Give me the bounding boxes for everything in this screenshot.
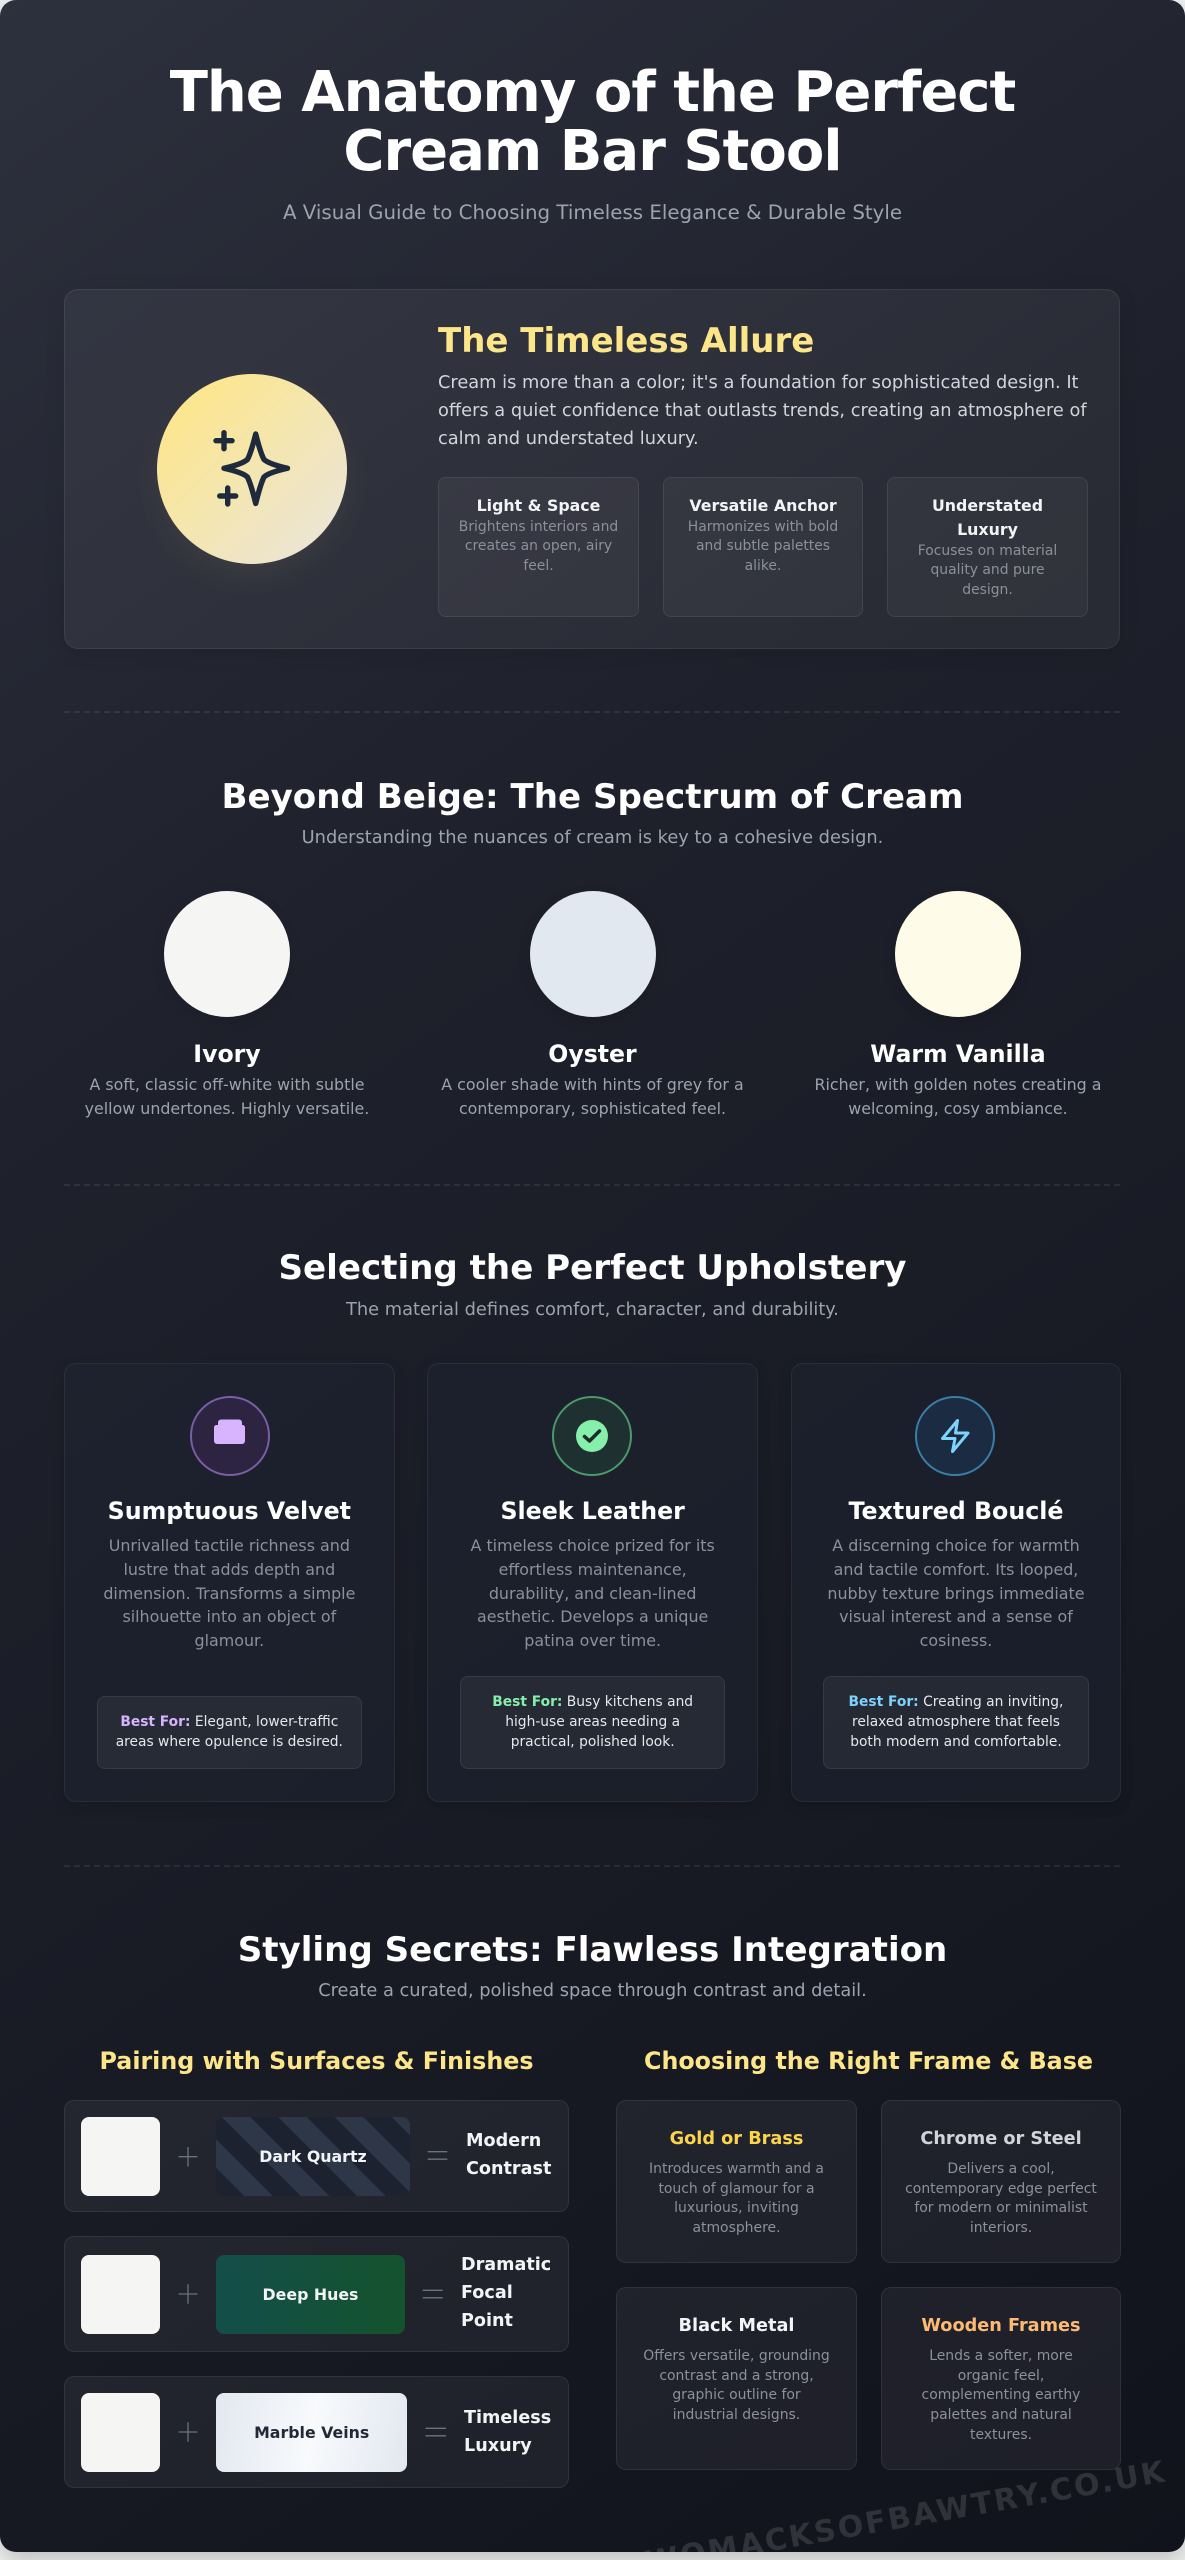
result: Timeless <box>464 2408 551 2428</box>
heading: upholstery: Selecting the Perfect Upholstery <box>278 1248 906 1288</box>
card description: dimension. Transforms a simple <box>103 1584 355 1602</box>
swatch: oyster <box>441 891 744 1118</box>
card description <box>827 1536 1085 1650</box>
swatch: oyster: contemporary, sophisticated feel. <box>459 1099 726 1118</box>
frame card: wooden frames: Lends a softer, more <box>929 2348 1073 2364</box>
heading: styling: Styling Secrets: Flawless Integration <box>238 1930 947 1970</box>
frame card: wooden frames: complementing earthy <box>922 2387 1080 2403</box>
card description: visual interest and a sense of <box>839 1607 1073 1626</box>
card: understated luxury: Luxury <box>957 520 1018 538</box>
card description <box>470 1536 715 1650</box>
icon: velvet <box>190 1396 270 1476</box>
heading: spectrum: Beyond Beige: The Spectrum of Cream <box>222 776 964 816</box>
frame card: chrome or steel: Chrome or Steel <box>920 2128 1082 2148</box>
card description: A discerning choice for warmth <box>832 1536 1080 1555</box>
intro paragraph: Cream is more than a color; it's a foundation for sophisticated design. It <box>438 372 1079 393</box>
best for: Best For: Busy kitchens and <box>492 1694 693 1710</box>
equals sign <box>426 2428 446 2436</box>
card: versatile anchor: Versatile Anchor <box>689 496 837 514</box>
swatch: warm vanilla: welcoming, cosy ambiance. <box>848 1099 1068 1118</box>
card: light & space: Light & Space <box>477 496 600 514</box>
swatch: oyster: A cooler shade with hints of grey for a <box>441 1075 744 1094</box>
frame card: wooden frames: palettes and natural <box>930 2407 1072 2423</box>
card title: Textured Bouclé <box>849 1496 1063 1524</box>
panel: velvet <box>64 1363 395 1802</box>
frame card: black metal: graphic outline for <box>672 2387 801 2403</box>
card title: Sleek Leather <box>500 1496 685 1524</box>
best for <box>823 1676 1089 1769</box>
swatch: ivory: A soft, classic off-white with subtle <box>90 1075 364 1094</box>
title: The Anatomy of the Perfect <box>170 60 1015 125</box>
frame card: gold or brass: Introduces warmth and a <box>649 2161 824 2177</box>
result <box>466 2131 551 2179</box>
frame card: gold or brass: atmosphere. <box>692 2220 781 2236</box>
pairing row: dramatic focal point <box>64 2236 569 2352</box>
swatch: warm vanilla <box>815 891 1101 1118</box>
card: understated luxury: Understated <box>932 496 1043 514</box>
subtitle: A Visual Guide to Choosing Timeless Elegance & Durable Style <box>283 201 902 224</box>
surface: marble veins <box>216 2393 407 2472</box>
best for <box>460 1676 725 1769</box>
card description: aesthetic. Develops a unique <box>477 1607 708 1626</box>
card: light & space: creates an open, airy <box>465 538 612 554</box>
best for: Best For: Elegant, lower-traffic <box>120 1714 338 1730</box>
frame card: black metal: Offers versatile, grounding <box>643 2348 830 2364</box>
best for: high-use areas needing a <box>505 1714 680 1730</box>
intro paragraph <box>438 372 1087 448</box>
swatch: ivory <box>85 891 369 1118</box>
stool swatch <box>81 2255 160 2334</box>
intro paragraph: calm and understated luxury. <box>438 428 699 448</box>
stool swatch <box>81 2393 160 2472</box>
frame card: gold or brass: touch of glamour for a <box>658 2181 815 2197</box>
frame card: chrome or steel: contemporary edge perfect <box>905 2181 1097 2197</box>
column heading: pairing: Pairing with Surfaces & Finishes <box>100 2046 533 2074</box>
result <box>464 2408 551 2456</box>
surface: deep hues: Deep Hues <box>263 2285 358 2304</box>
frame card: wooden frames <box>881 2287 1121 2470</box>
swatch: oyster: Oyster <box>548 1040 637 1068</box>
card: understated luxury: Focuses on material <box>918 542 1057 558</box>
surface: dark quartz <box>216 2117 410 2196</box>
best for: relaxed atmosphere that feels <box>852 1714 1060 1730</box>
plus sign <box>178 2284 198 2304</box>
surface: deep hues <box>216 2255 405 2334</box>
card: versatile anchor: and subtle palettes <box>696 538 830 554</box>
icon: boucle <box>915 1396 995 1476</box>
card description: patina over time. <box>524 1631 661 1650</box>
panel: leather <box>427 1363 758 1802</box>
best for: practical, polished look. <box>511 1734 675 1750</box>
card: light & space <box>438 477 639 617</box>
swatch: warm vanilla: Warm Vanilla <box>870 1040 1046 1068</box>
heading: The Timeless Allure <box>438 321 814 361</box>
card description: cosiness. <box>920 1631 992 1650</box>
frame card: black metal: contrast and a strong, <box>659 2368 814 2384</box>
card: light & space: Brightens interiors and <box>459 518 618 534</box>
plus sign <box>178 2147 198 2166</box>
card description: A timeless choice prized for its <box>471 1536 715 1555</box>
swatch: ivory: Ivory <box>193 1040 261 1068</box>
card description: nubby texture brings immediate <box>827 1584 1085 1602</box>
best for: areas where opulence is desired. <box>116 1734 343 1750</box>
result: Modern <box>466 2131 541 2151</box>
frame card: wooden frames: organic feel, <box>958 2368 1044 2384</box>
card description: durability, and clean-lined <box>489 1584 696 1602</box>
surface: dark quartz: Dark Quartz <box>259 2147 367 2166</box>
result <box>461 2255 551 2331</box>
subheading: styling: Create a curated, polished space through contrast and detail. <box>318 1980 867 2001</box>
icon: sparkles in cream circle <box>157 374 347 568</box>
equals sign <box>428 2151 448 2160</box>
card: versatile anchor: alike. <box>745 558 781 574</box>
card: versatile anchor: Harmonizes with bold <box>688 518 838 534</box>
frame card: wooden frames: Wooden Frames <box>921 2316 1081 2336</box>
frame card: black metal: Black Metal <box>679 2316 794 2336</box>
card description: and tactile comfort. Its looped, <box>834 1560 1078 1579</box>
frame card: gold or brass <box>616 2100 857 2263</box>
title <box>170 60 1015 184</box>
swatch: ivory: yellow undertones. Highly versatile. <box>85 1099 369 1118</box>
card: versatile anchor <box>663 477 863 617</box>
column heading: frames: Choosing the Right Frame & Base <box>644 2046 1093 2074</box>
panel: boucle <box>791 1363 1121 1802</box>
frame card: black metal <box>616 2287 857 2470</box>
title: Cream Bar Stool <box>343 118 842 184</box>
card: understated luxury: design. <box>962 582 1013 598</box>
card description: lustre that adds depth and <box>123 1560 335 1579</box>
card description: glamour. <box>194 1631 264 1650</box>
card description: silhouette into an object of <box>122 1607 336 1626</box>
stool swatch <box>81 2117 160 2196</box>
frame card: chrome or steel: interiors. <box>970 2220 1032 2236</box>
intro paragraph: offers a quiet confidence that outlasts trends, creating an atmosphere of <box>438 400 1087 421</box>
pairing row: modern contrast <box>64 2100 569 2212</box>
panel: the timeless allure <box>64 289 1120 649</box>
result: Contrast <box>466 2159 551 2179</box>
frame card: chrome or steel <box>881 2100 1121 2263</box>
subheading: spectrum: Understanding the nuances of cream is key to a cohesive design. <box>302 827 883 848</box>
plus sign <box>178 2422 198 2442</box>
frame card: chrome or steel: Delivers a cool, <box>947 2161 1055 2177</box>
icon: leather <box>552 1396 632 1476</box>
card description: Unrivalled tactile richness and <box>109 1536 350 1555</box>
result: Point <box>461 2311 513 2331</box>
card: understated luxury: quality and pure <box>930 562 1045 578</box>
frame card: black metal: industrial designs. <box>673 2407 800 2423</box>
equals sign <box>422 2290 443 2298</box>
frame card: wooden frames: textures. <box>970 2427 1032 2443</box>
subheading: upholstery: The material defines comfort, character, and durability. <box>346 1298 839 1320</box>
card description <box>103 1536 355 1650</box>
result: Focal <box>461 2283 513 2303</box>
best for: both modern and comfortable. <box>850 1734 1062 1750</box>
card: understated luxury <box>887 477 1088 617</box>
result: Luxury <box>464 2436 532 2456</box>
best for <box>97 1696 362 1769</box>
frame card: gold or brass: Gold or Brass <box>670 2128 803 2148</box>
best for: Best For: Creating an inviting, <box>849 1694 1063 1710</box>
card title: Sumptuous Velvet <box>108 1496 351 1524</box>
frame card: gold or brass: luxurious, inviting <box>674 2200 799 2216</box>
surface: marble veins: Marble Veins <box>254 2423 369 2442</box>
frame card: chrome or steel: for modern or minimalist <box>914 2200 1088 2216</box>
card: light & space: feel. <box>523 558 554 574</box>
pairing row: timeless luxury <box>64 2376 569 2488</box>
swatch: warm vanilla: Richer, with golden notes creating a <box>815 1075 1101 1094</box>
result: Dramatic <box>461 2255 551 2275</box>
card description: effortless maintenance, <box>499 1560 687 1579</box>
